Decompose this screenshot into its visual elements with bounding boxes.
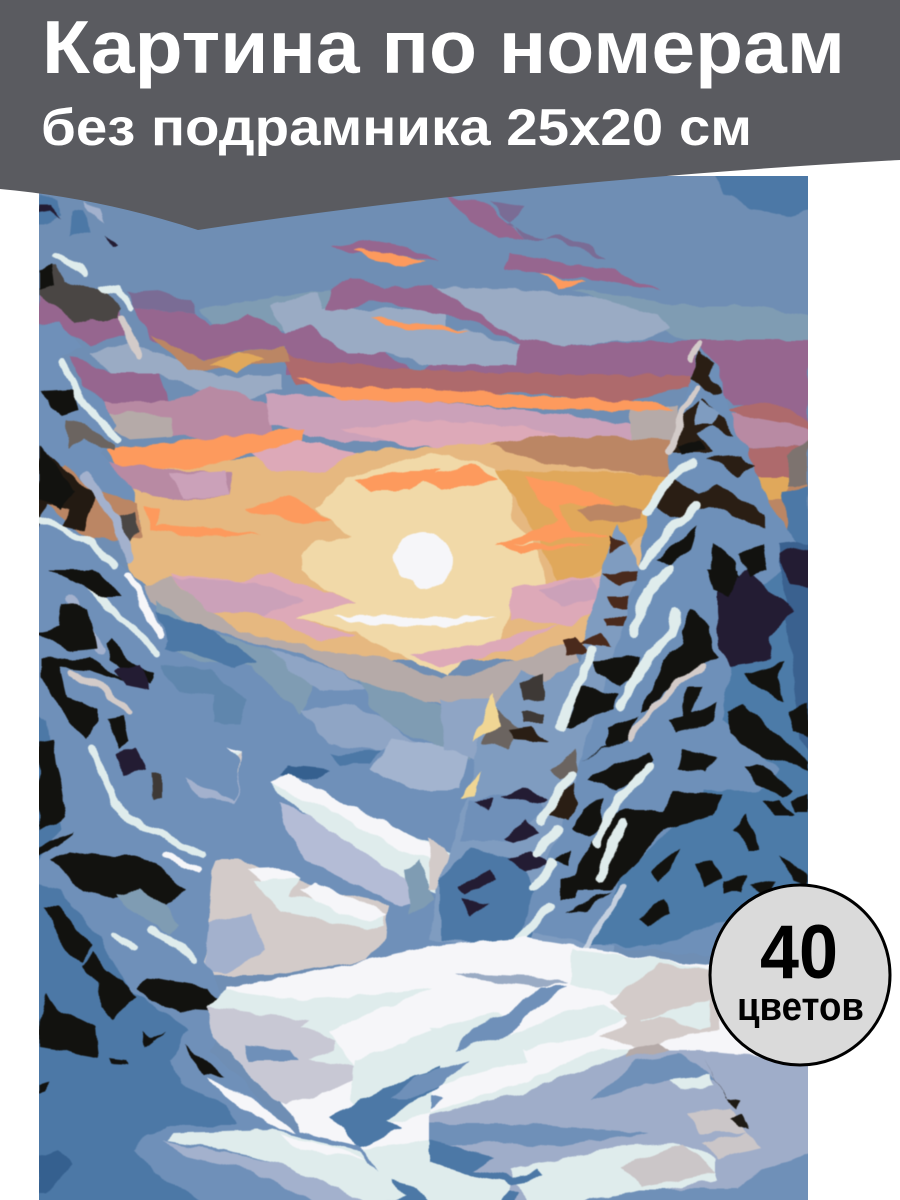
snow: bottom left drift <box>135 1080 406 1200</box>
snow field <box>135 938 830 1200</box>
back right tree <box>429 524 640 952</box>
left tree: snow highlights <box>42 255 205 960</box>
badge: 40 colours: 40 <box>760 910 838 995</box>
badge: 40 colours <box>710 885 890 1065</box>
painting: winter sunset landscape <box>39 176 808 1200</box>
left tree: dark shadows <box>39 445 229 1092</box>
lower left block <box>39 1150 72 1193</box>
left tree <box>39 194 241 1200</box>
sky: pale cloud layers <box>89 288 830 406</box>
subtitle: без подрамника 25х20 см <box>41 99 752 157</box>
snow hills <box>186 747 451 978</box>
sun reflection <box>335 615 497 627</box>
header banner <box>0 0 900 230</box>
sky: purple clouds <box>39 196 808 420</box>
badge: 40 colours: цветов <box>737 985 864 1029</box>
sky: rust and brown bands <box>150 335 808 430</box>
bare sapling <box>708 1065 750 1130</box>
right big tree <box>517 344 830 960</box>
distant forest <box>134 576 580 792</box>
right tree: top tiers <box>657 349 763 526</box>
left tree: brown patch <box>39 465 140 540</box>
right tree: dark branches <box>555 570 808 927</box>
title: Картина по номерам <box>42 5 845 89</box>
sky: lower glow <box>100 436 808 660</box>
sun halo <box>296 452 546 678</box>
sky: pink bands <box>102 385 808 449</box>
sun <box>394 532 452 590</box>
snow: blue stream <box>329 987 567 1200</box>
snow: pale blue lower right <box>430 1050 830 1200</box>
right tree: snow highlights <box>517 344 703 953</box>
sky: orange streaks <box>106 248 676 552</box>
sky: rose and lilac clouds <box>102 440 610 668</box>
left tree: top branches <box>39 196 63 224</box>
sky: upper right dark cloud <box>715 176 808 218</box>
sky base <box>39 176 808 1134</box>
